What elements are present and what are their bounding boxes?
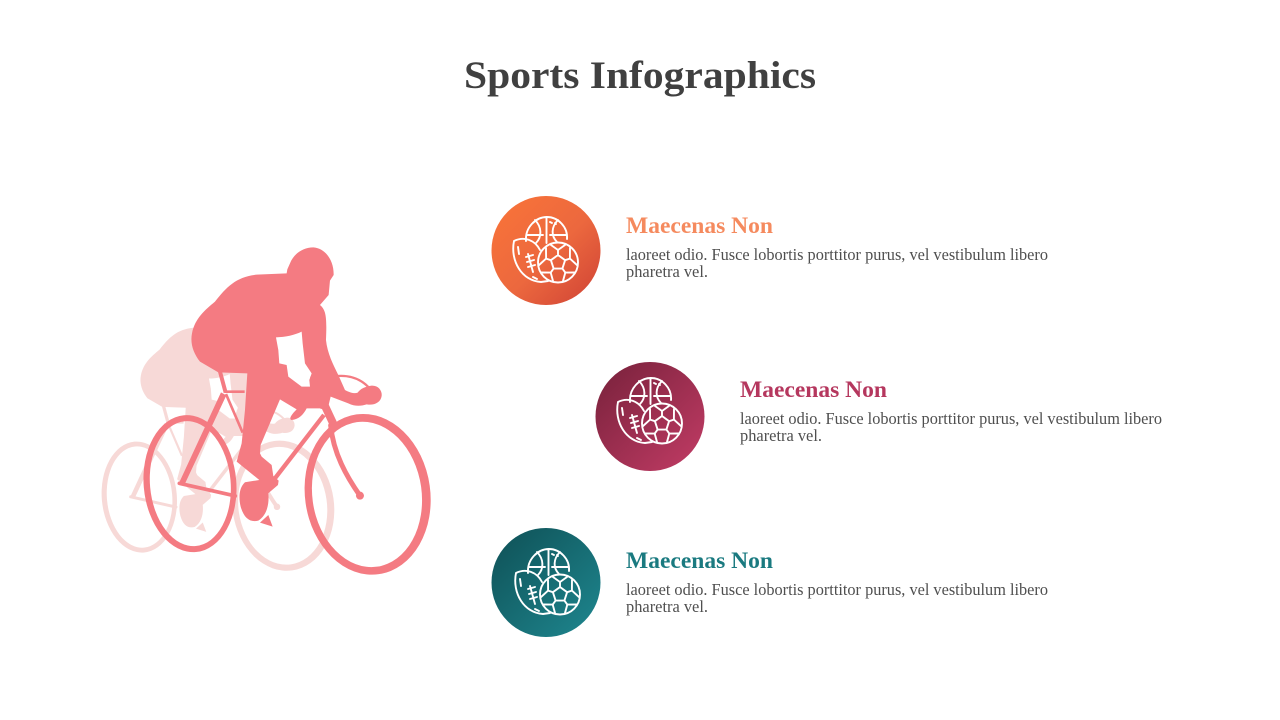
text 2: pharetra vel.	[740, 426, 822, 445]
text 1: pharetra vel.	[626, 262, 708, 281]
item 3	[492, 528, 1048, 637]
text 2	[740, 409, 1162, 445]
heading 1: Maecenas Non	[626, 213, 773, 238]
text 3	[626, 580, 1048, 616]
heading 2: Maecenas Non	[740, 377, 887, 402]
text 1: laoreet odio. Fusce lobortis porttitor purus, vel vestibulum libero	[626, 245, 1048, 264]
text 3: pharetra vel.	[626, 597, 708, 616]
icon: sports balls orange	[492, 196, 600, 305]
text 2: laoreet odio. Fusce lobortis porttitor purus, vel vestibulum libero	[740, 409, 1162, 428]
heading 3: Maecenas Non	[626, 548, 773, 573]
main cyclist	[138, 247, 441, 583]
icon: sports balls crimson	[596, 362, 704, 471]
title: Sports Infographics	[464, 54, 816, 97]
item 2	[596, 362, 1162, 471]
shadow cyclist	[97, 306, 343, 577]
item 1	[492, 196, 1048, 305]
text 1	[626, 245, 1048, 281]
illustration: cyclists	[97, 247, 441, 583]
icon: sports balls teal	[492, 528, 600, 637]
text 3: laoreet odio. Fusce lobortis porttitor purus, vel vestibulum libero	[626, 580, 1048, 599]
